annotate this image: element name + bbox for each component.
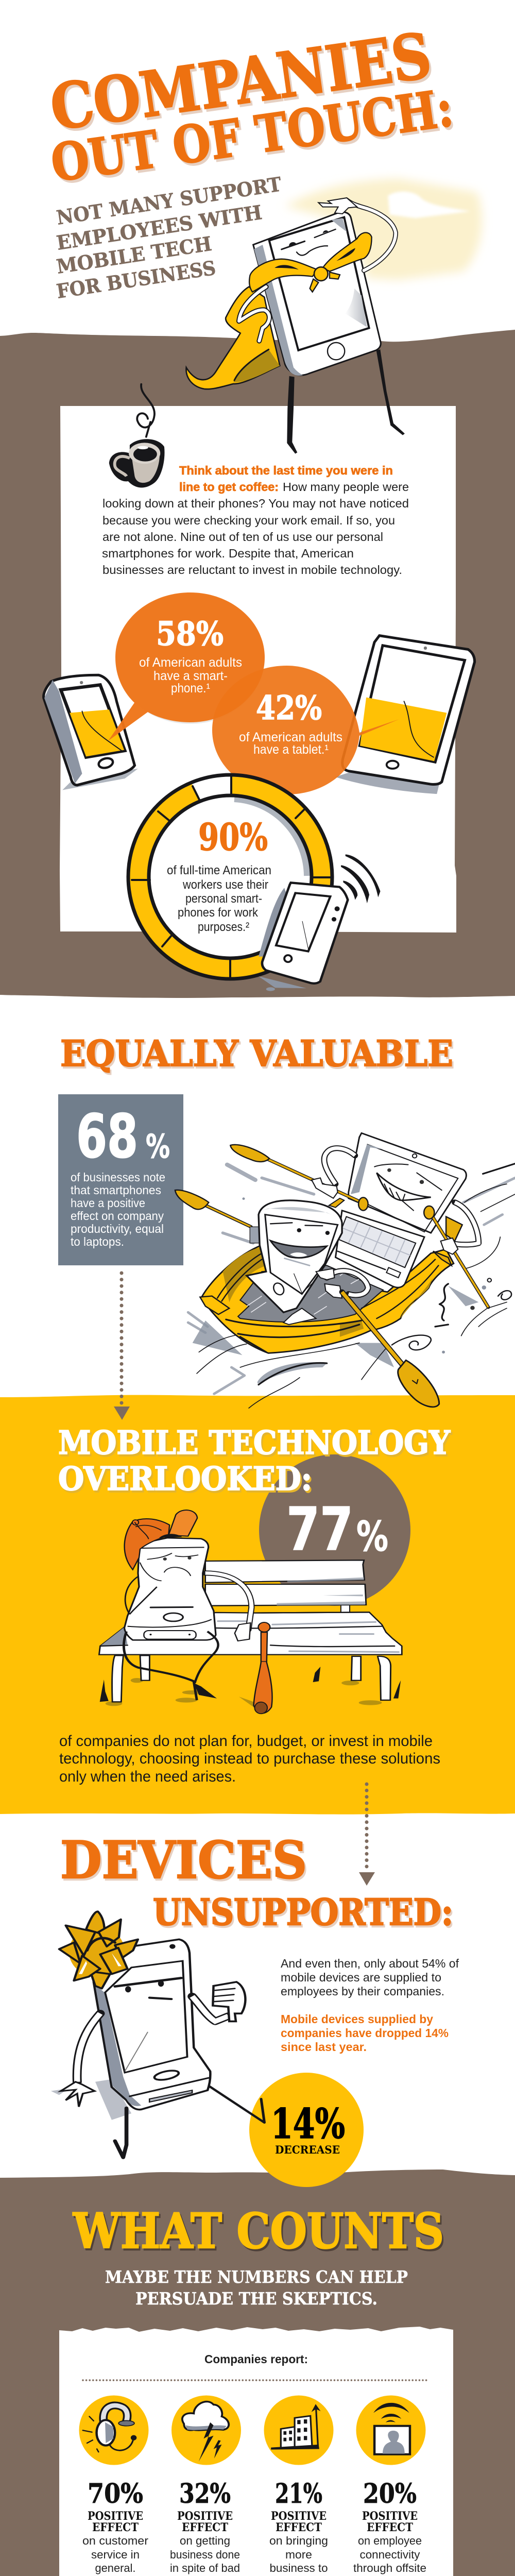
callout: 68% stat box: that smartphones bbox=[71, 1183, 161, 1197]
text: stat 70%: on customer bbox=[82, 2534, 148, 2547]
panel: brown intro band bbox=[0, 330, 515, 998]
text: stat 20%: 20% bbox=[363, 2478, 417, 2510]
text: 90% caption: 90% bbox=[198, 815, 268, 859]
callout: 58% bubble: 58% bbox=[156, 615, 224, 653]
icon: headset bbox=[79, 2396, 148, 2465]
arrow: dotted arrow to devices text bbox=[359, 1784, 375, 1886]
subtitle: FOR BUSINESS bbox=[55, 256, 217, 303]
text: intro paragraph: are not alone. Nine out of ten of us use our personal bbox=[102, 530, 383, 544]
callout: 58% bubble: phone.¹ bbox=[171, 681, 210, 696]
text: stat 32%: business done bbox=[170, 2548, 240, 2561]
icon: tablet half full bbox=[335, 636, 475, 794]
text: intro paragraph: Think about the last time you were in bbox=[179, 464, 393, 477]
text: stat 70%: EFFECT bbox=[92, 2521, 139, 2534]
text: 77% description: technology, choosing instead to purchase these solutions bbox=[59, 1750, 440, 1767]
text: stat 70%: POSITIVE bbox=[88, 2510, 143, 2523]
heading: equally valuable: EQUALLY VALUABLE bbox=[60, 1033, 453, 1075]
text: stat 20%: on employee bbox=[358, 2534, 422, 2547]
callout: 68% stat box: productivity, equal bbox=[71, 1222, 164, 1235]
callout: 58% bubble: of American adults bbox=[139, 655, 242, 670]
icon: growing buildings bbox=[264, 2396, 334, 2465]
text: intro paragraph: line to get coffee: bbox=[179, 480, 279, 494]
callout: 42% bubble: 42% bbox=[256, 689, 322, 727]
callout: 14% decrease circle: 14% bbox=[271, 2099, 345, 2148]
callout: 77% figure: 77 bbox=[286, 1495, 353, 1564]
heading: mobile technology overlooked: OVERLOOKED: bbox=[58, 1460, 312, 1498]
text: 77% description: only when the need arises. bbox=[59, 1768, 236, 1785]
callout: 42% bubble bbox=[212, 666, 399, 794]
text: intro paragraph bbox=[102, 464, 409, 577]
subtitle: MOBILE TECH bbox=[55, 232, 213, 278]
callout: 58% bubble bbox=[108, 592, 265, 741]
text: stat 32%: in spite of bad bbox=[170, 2562, 240, 2574]
text: 90% caption: purposes.² bbox=[198, 920, 249, 934]
subheading: persuade the skeptics: PERSUADE THE SKEPTICS. bbox=[135, 2289, 377, 2309]
text: stat 21%: more bbox=[285, 2548, 312, 2561]
text: 90% caption: phones for work bbox=[178, 906, 259, 920]
text: stat 32% bbox=[170, 2478, 240, 2576]
callout: 68% stat box: % bbox=[146, 1128, 170, 1165]
illustration: phone and laptop rowing a boat bbox=[175, 1133, 515, 1408]
text: devices paragraph bbox=[281, 1957, 459, 2054]
text: devices paragraph: mobile devices are supplied to bbox=[281, 1971, 441, 1984]
icon: storm cloud bbox=[171, 2396, 241, 2465]
text: stat 70%: service in bbox=[91, 2548, 140, 2561]
text: stat 32%: POSITIVE bbox=[177, 2510, 233, 2523]
icon: smartphone half full bbox=[44, 675, 138, 790]
text: stat 20%: through offsite bbox=[353, 2562, 426, 2574]
illustration: grumpy gift phone with bow bbox=[51, 1911, 264, 2158]
text: 77% description bbox=[59, 1733, 440, 1785]
callout: 68% stat box: 68 bbox=[76, 1102, 138, 1172]
callout: 14% decrease circle: DECREASE bbox=[275, 2143, 340, 2156]
text: 90% caption: of full-time American bbox=[167, 863, 271, 877]
text: intro paragraph: businesses are reluctant to invest in mobile technology. bbox=[102, 563, 402, 577]
callout: 58% bubble: have a smart- bbox=[153, 669, 228, 683]
subtitle: NOT MANY SUPPORT bbox=[55, 172, 283, 229]
text: stat 21% bbox=[264, 2478, 333, 2576]
text: devices paragraph: And even then, only about 54% of bbox=[281, 1957, 459, 1970]
callout: 68% stat box: to laptops. bbox=[71, 1235, 124, 1248]
text: stat 70%: general. bbox=[95, 2562, 136, 2574]
callout: 77% figure: % bbox=[356, 1513, 388, 1561]
heading: devices unsupported bbox=[60, 1831, 453, 1934]
text: 90% caption: workers use their bbox=[182, 878, 268, 892]
callout: 68% stat box: have a positive bbox=[71, 1196, 145, 1210]
callout: 14% decrease circle bbox=[249, 2073, 364, 2187]
text: stat 21%: business to bbox=[270, 2562, 328, 2574]
text: stat 20%: POSITIVE bbox=[362, 2510, 418, 2523]
subtitle bbox=[55, 172, 283, 303]
text: stat 21%: on bringing bbox=[269, 2534, 328, 2547]
callout: 68% stat box bbox=[58, 1094, 183, 1265]
heading: mobile technology overlooked: MOBILE TECHNOLOGY bbox=[58, 1423, 451, 1462]
callout: 68% stat box: of businesses note bbox=[71, 1171, 165, 1184]
text: intro paragraph: smartphones for work. Despite that, American bbox=[102, 547, 354, 560]
subtitle: EMPLOYEES WITH bbox=[55, 200, 264, 255]
text: stat 21%: POSITIVE bbox=[271, 2510, 327, 2523]
callout: 42% bubble: have a tablet.¹ bbox=[253, 742, 329, 757]
text: 90% caption bbox=[167, 815, 271, 934]
illustration: superhero phone with cape bbox=[186, 179, 482, 454]
callout: 42% bubble: of American adults bbox=[239, 730, 342, 744]
text: devices paragraph: Mobile devices supplied by bbox=[281, 2012, 433, 2026]
subheading: persuade the skeptics bbox=[105, 2267, 408, 2309]
text: stat 32%: 32% bbox=[179, 2478, 231, 2510]
text: stat 21%: 21% bbox=[275, 2478, 322, 2510]
callout: 68% stat box: effect on company bbox=[71, 1209, 164, 1223]
panel: white intro sheet bbox=[60, 406, 456, 933]
text: devices paragraph: companies have dropped 14% bbox=[281, 2026, 449, 2040]
icon: coffee cup with steam bbox=[109, 384, 165, 487]
heading: devices unsupported: UNSUPPORTED: bbox=[153, 1891, 453, 1934]
title: companies out of touch: OUT OF TOUCH: bbox=[47, 78, 457, 194]
text: devices paragraph: employees by their companies. bbox=[281, 1985, 444, 1998]
chart: 90% ring bbox=[128, 775, 332, 979]
text: intro paragraph: looking down at their phones? You may not have noticed bbox=[102, 497, 409, 510]
title: companies out of touch: COMPANIES bbox=[46, 19, 436, 145]
text: intro paragraph: How many people were bbox=[283, 480, 409, 494]
text: intro paragraph: because you were checking your work email. If so, you bbox=[102, 514, 395, 527]
heading: devices unsupported: DEVICES bbox=[60, 1831, 307, 1890]
text: stat 20%: connectivity bbox=[359, 2548, 420, 2561]
illustration: sad phone on bench bbox=[99, 1510, 402, 1714]
text: stat 20% bbox=[353, 2478, 426, 2576]
panel: torn receipt of company reports bbox=[59, 2327, 453, 2576]
heading: mobile technology overlooked bbox=[58, 1423, 451, 1498]
text: stat 70%: 70% bbox=[88, 2478, 143, 2510]
panel: gold band bbox=[0, 1395, 515, 1815]
panel: brown what counts band bbox=[0, 2170, 515, 2576]
icon: wifi video meeting bbox=[356, 2396, 425, 2465]
arrow: dotted arrow from stat box bbox=[114, 1273, 130, 1420]
text: stat 32%: on getting bbox=[180, 2534, 230, 2547]
text: stat 21%: EFFECT bbox=[276, 2521, 322, 2534]
heading: what counts: WHAT COUNTS bbox=[73, 2203, 444, 2260]
text: devices paragraph: since last year. bbox=[281, 2040, 367, 2054]
text: 90% caption: personal smart- bbox=[185, 892, 262, 906]
text: stat 70% bbox=[82, 2478, 148, 2574]
title: companies out of touch bbox=[46, 19, 457, 194]
text: companies report label: Companies report: bbox=[204, 2352, 308, 2366]
text: stat 32%: EFFECT bbox=[182, 2521, 229, 2534]
text: 77% description: of companies do not plan for, budget, or invest in mobile bbox=[59, 1733, 433, 1750]
subheading: persuade the skeptics: MAYBE THE NUMBERS CAN HELP bbox=[105, 2267, 408, 2287]
text: stat 20%: EFFECT bbox=[367, 2521, 414, 2534]
icon: vibrating phone bbox=[259, 854, 381, 991]
chart: 77% circle background bbox=[259, 1454, 410, 1606]
